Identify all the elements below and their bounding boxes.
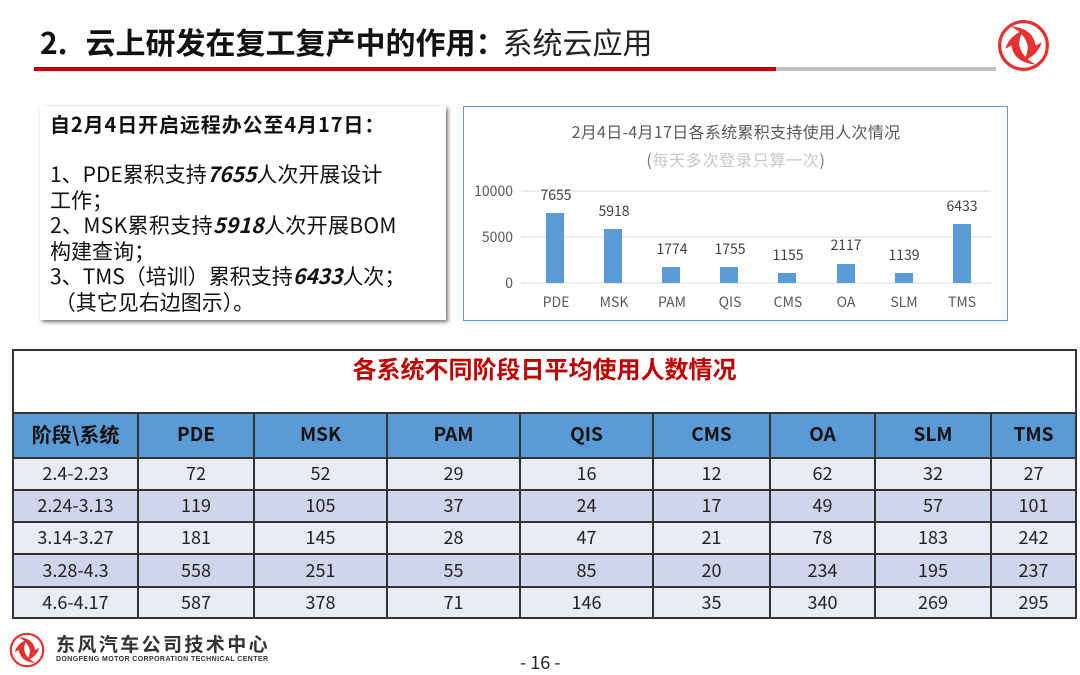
panel: cumulative usage bar chart (463, 106, 1008, 321)
table: daily average users by stage: 24 (576, 492, 596, 518)
table: daily average users by stage: 237 (1018, 556, 1048, 582)
table: daily average users by stage: 242 (1018, 524, 1048, 550)
table row 3.14-3.27 (14, 523, 1077, 555)
table: daily average users by stage: 181 (181, 524, 211, 550)
table: daily average users by stage: 145 (306, 524, 335, 550)
table: daily average users by stage: 57 (923, 492, 943, 518)
summary list: 1、PDE累积支持7655人次开展设计 (50, 159, 382, 189)
bar value labels: 6433 (946, 196, 978, 216)
bars (546, 213, 971, 283)
footer english name: DONGFENG MOTOR CORPORATION TECHNICAL CENTER (56, 656, 268, 663)
summary list: 3、TMS（培训）累积支持6433人次； (50, 261, 405, 291)
icon: Dongfeng logo footer (10, 632, 44, 668)
category labels: PDE (543, 292, 569, 312)
table: daily average users by stage: 32 (923, 460, 943, 486)
table: daily average users by stage: 16 (576, 460, 596, 486)
table: daily average users by stage: OA (809, 420, 836, 447)
bar value labels: 1774 (656, 239, 688, 259)
table: daily average users by stage: 2.4-2.23 (42, 460, 109, 486)
table: daily average users by stage: 101 (1018, 492, 1048, 518)
table: daily average users by stage: 340 (808, 588, 837, 614)
table: daily average users by stage: 234 (808, 556, 837, 582)
title underline (34, 67, 996, 71)
table: daily average users by stage: 2.24-3.13 (37, 492, 114, 518)
table: daily average users by stage: 269 (918, 588, 948, 614)
table: daily average users by stage: 17 (702, 492, 721, 518)
table title: 各系统不同阶段日平均使用人数情况 (352, 350, 736, 385)
table: daily average users by stage: PDE (177, 420, 215, 447)
table: daily average users by stage: 29 (444, 460, 463, 486)
chart axis (474, 181, 991, 293)
category labels: TMS (948, 292, 976, 312)
bar value labels: 7655 (540, 185, 572, 205)
table header row (14, 414, 1077, 459)
bar value labels: 1155 (772, 245, 804, 265)
table: daily average users by stage: 72 (186, 460, 206, 486)
table row 4.6-4.17 (14, 588, 1077, 619)
category labels (543, 292, 976, 312)
table: daily average users by stage: 47 (576, 524, 596, 550)
bar value labels: 5918 (598, 201, 630, 221)
table: daily average users by stage: 85 (576, 556, 596, 582)
table row 2.24-3.13 (14, 491, 1077, 523)
summary list: 2、MSK累积支持5918人次开展BOM (50, 210, 397, 240)
table: daily average users by stage: 3.14-3.27 (37, 524, 114, 550)
table: daily average users by stage: MSK (300, 420, 341, 447)
table: daily average users by stage: QIS (570, 420, 603, 447)
table row 2.4-2.23 (14, 459, 1077, 491)
table: daily average users by stage: 3.28-4.3 (42, 556, 109, 582)
table: daily average users by stage: 587 (181, 588, 211, 614)
chart axis: 5000 (482, 227, 513, 247)
summary list: （其它见右边图示）。 (55, 286, 254, 316)
table: daily average users by stage: 105 (306, 492, 335, 518)
table: daily average users by stage: 35 (702, 588, 721, 614)
category labels: CMS (774, 292, 802, 312)
table: daily average users by stage: 12 (702, 460, 721, 486)
summary list: 构建查询； (50, 236, 155, 266)
page number: - 16 - (520, 649, 561, 675)
table: daily average users by stage: TMS (1014, 420, 1053, 447)
bar value labels: 2117 (830, 235, 862, 255)
table: daily average users by stage: 378 (306, 588, 335, 614)
table: daily average users by stage: 21 (702, 524, 721, 550)
bar value labels: 1139 (888, 245, 920, 265)
table: daily average users by stage: 49 (812, 492, 832, 518)
table: daily average users by stage: 62 (812, 460, 832, 486)
chart title: 2月4日-4月17日各系统累积支持使用人次情况 (572, 119, 900, 143)
table: daily average users by stage: 558 (181, 556, 211, 582)
bar value labels: 1755 (714, 239, 746, 259)
category labels: SLM (890, 292, 918, 312)
table: daily average users by stage: 119 (181, 492, 211, 518)
table: daily average users by stage: 28 (444, 524, 463, 550)
category labels: MSK (600, 292, 628, 312)
table: daily average users by stage: 195 (918, 556, 948, 582)
table: daily average users by stage: 295 (1018, 588, 1048, 614)
table: daily average users by stage: 27 (1024, 460, 1043, 486)
category labels: QIS (719, 292, 741, 312)
table title (14, 351, 1077, 414)
category labels: PAM (658, 292, 686, 312)
table: daily average users by stage: SLM (913, 420, 953, 447)
chart axis: 0 (505, 273, 513, 293)
table: daily average users by stage: 251 (306, 556, 335, 582)
table: daily average users by stage: 78 (812, 524, 832, 550)
table row 3.28-4.3 (14, 555, 1077, 588)
table: daily average users by stage: CMS (691, 420, 732, 447)
table: daily average users by stage (12, 349, 1077, 619)
table: daily average users by stage: 183 (918, 524, 948, 550)
summary list (50, 159, 405, 316)
chart axis: 10000 (474, 181, 513, 201)
table: daily average users by stage: 37 (444, 492, 463, 518)
footer organization name: 东风汽车公司技术中心 (56, 630, 270, 657)
table: daily average users by stage: 71 (444, 588, 463, 614)
chart subtitle: (每天多次登录只算一次) (646, 147, 826, 171)
title: 2. 云上研发在复工复产中的作用：系统云应用 (40, 19, 652, 63)
icon: Dongfeng logo top right (998, 20, 1049, 71)
summary list: 工作； (50, 184, 113, 214)
table: daily average users by stage: 55 (444, 556, 463, 582)
table: daily average users by stage: 52 (310, 460, 330, 486)
category labels: OA (837, 292, 856, 312)
table: daily average users by stage: PAM (434, 420, 474, 447)
table: daily average users by stage: 4.6-4.17 (42, 588, 109, 614)
panel: remote work summary (40, 106, 446, 320)
table: daily average users by stage: 阶段\系统 (32, 419, 119, 448)
bar value labels (540, 185, 978, 265)
table: daily average users by stage: 146 (572, 588, 601, 614)
table: daily average users by stage: 20 (702, 556, 721, 582)
summary heading: 自2月4日开启远程办公至4月17日： (50, 109, 385, 138)
